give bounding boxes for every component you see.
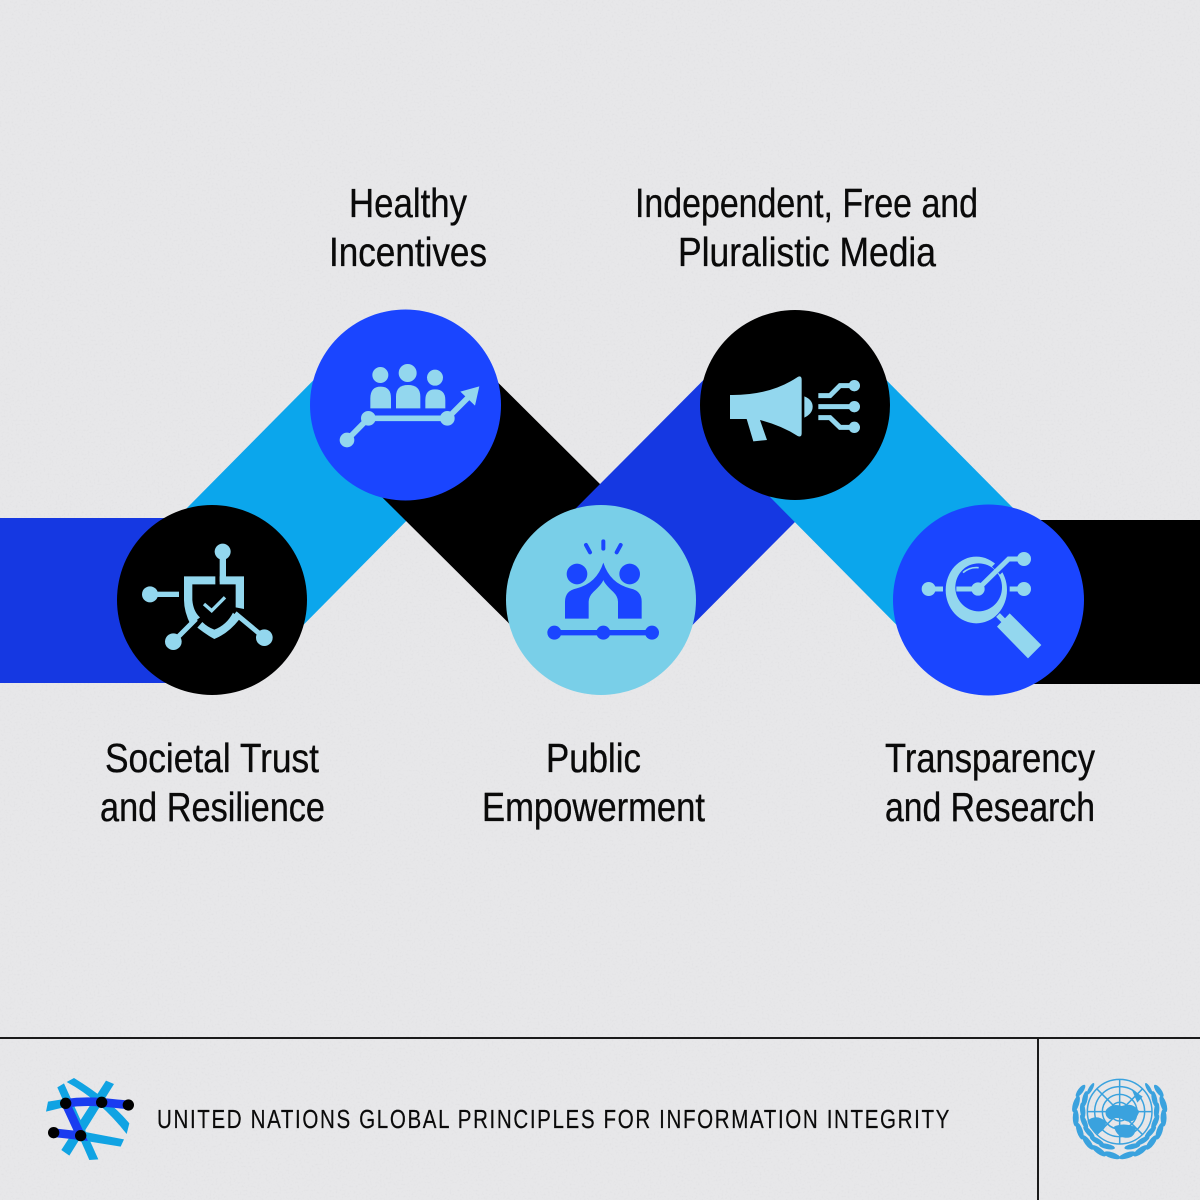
- heading: Public Empowerment: [482, 735, 706, 830]
- ribbon segment: black falling: [405, 405, 601, 600]
- circle: black: [700, 310, 890, 500]
- heading: Transparency and Research: and Research: [885, 784, 1095, 830]
- heading: Transparency and Research: [885, 735, 1095, 830]
- heading: Independent, Free and Pluralistic Media: Pluralistic Media: [678, 229, 936, 275]
- ribbon segment: light blue falling: [795, 405, 988, 600]
- icon: megaphone with network: [730, 376, 860, 441]
- heading: Independent, Free and Pluralistic Media: Independent, Free and: [635, 180, 978, 226]
- node: Independent, Free and Pluralistic Media: [700, 310, 890, 500]
- heading: Transparency and Research: Transparency: [885, 735, 1095, 781]
- node: Societal Trust and Resilience: [117, 505, 307, 695]
- ribbon segment: left blue band: [0, 518, 212, 683]
- icon: shield network: [142, 544, 273, 650]
- ribbon segment: right black band: [988, 520, 1200, 684]
- logo: United Nations emblem: [1070, 1079, 1169, 1161]
- ribbon segment: light blue rising: [212, 405, 405, 600]
- heading: Public Empowerment: Empowerment: [482, 784, 706, 830]
- heading: Healthy Incentives: Incentives: [329, 229, 487, 275]
- circle: blue: [893, 504, 1084, 696]
- heading: Independent, Free and Pluralistic Media: [635, 180, 978, 275]
- circle: black: [117, 505, 307, 695]
- circle: light blue: [506, 505, 696, 695]
- logo: information integrity mark: [46, 1078, 134, 1160]
- ribbon segment: blue rising: [601, 405, 795, 600]
- node: Public Empowerment: [506, 505, 696, 695]
- heading: Societal Trust and Resilience: and Resilience: [100, 784, 325, 830]
- heading: Healthy Incentives: Healthy: [349, 180, 467, 226]
- heading: Societal Trust and Resilience: Societal Trust: [105, 735, 320, 781]
- node: Healthy Incentives: [310, 310, 501, 500]
- icon: magnifying glass with network: [922, 552, 1041, 658]
- zigzag ribbon: [0, 405, 1200, 684]
- icon: high five: [547, 541, 659, 640]
- heading: Societal Trust and Resilience: [100, 735, 325, 830]
- footer title: UNITED NATIONS GLOBAL PRINCIPLES FOR INFORMATION INTEGRITY: [157, 1106, 951, 1134]
- icon: people with growth arrow: [340, 364, 479, 447]
- heading: Public Empowerment: Public: [546, 735, 641, 781]
- circle: blue: [310, 310, 501, 500]
- heading: Healthy Incentives: [329, 180, 487, 275]
- node: Transparency and Research: [893, 504, 1084, 696]
